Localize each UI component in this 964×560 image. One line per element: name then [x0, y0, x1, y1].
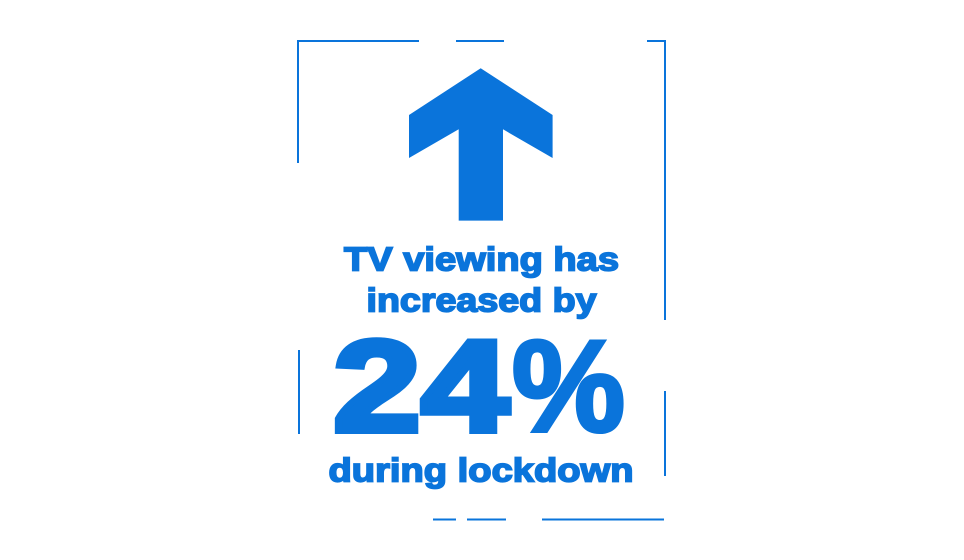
big number: %	[512, 313, 625, 459]
big number	[333, 313, 625, 459]
icon: up arrow	[409, 68, 553, 221]
heading line 1: TV viewing has	[344, 242, 619, 279]
broken frame border	[298, 41, 665, 520]
big number: 24	[333, 313, 509, 459]
closing line: during lockdown	[328, 453, 634, 490]
heading line 2: increased by	[366, 283, 597, 320]
